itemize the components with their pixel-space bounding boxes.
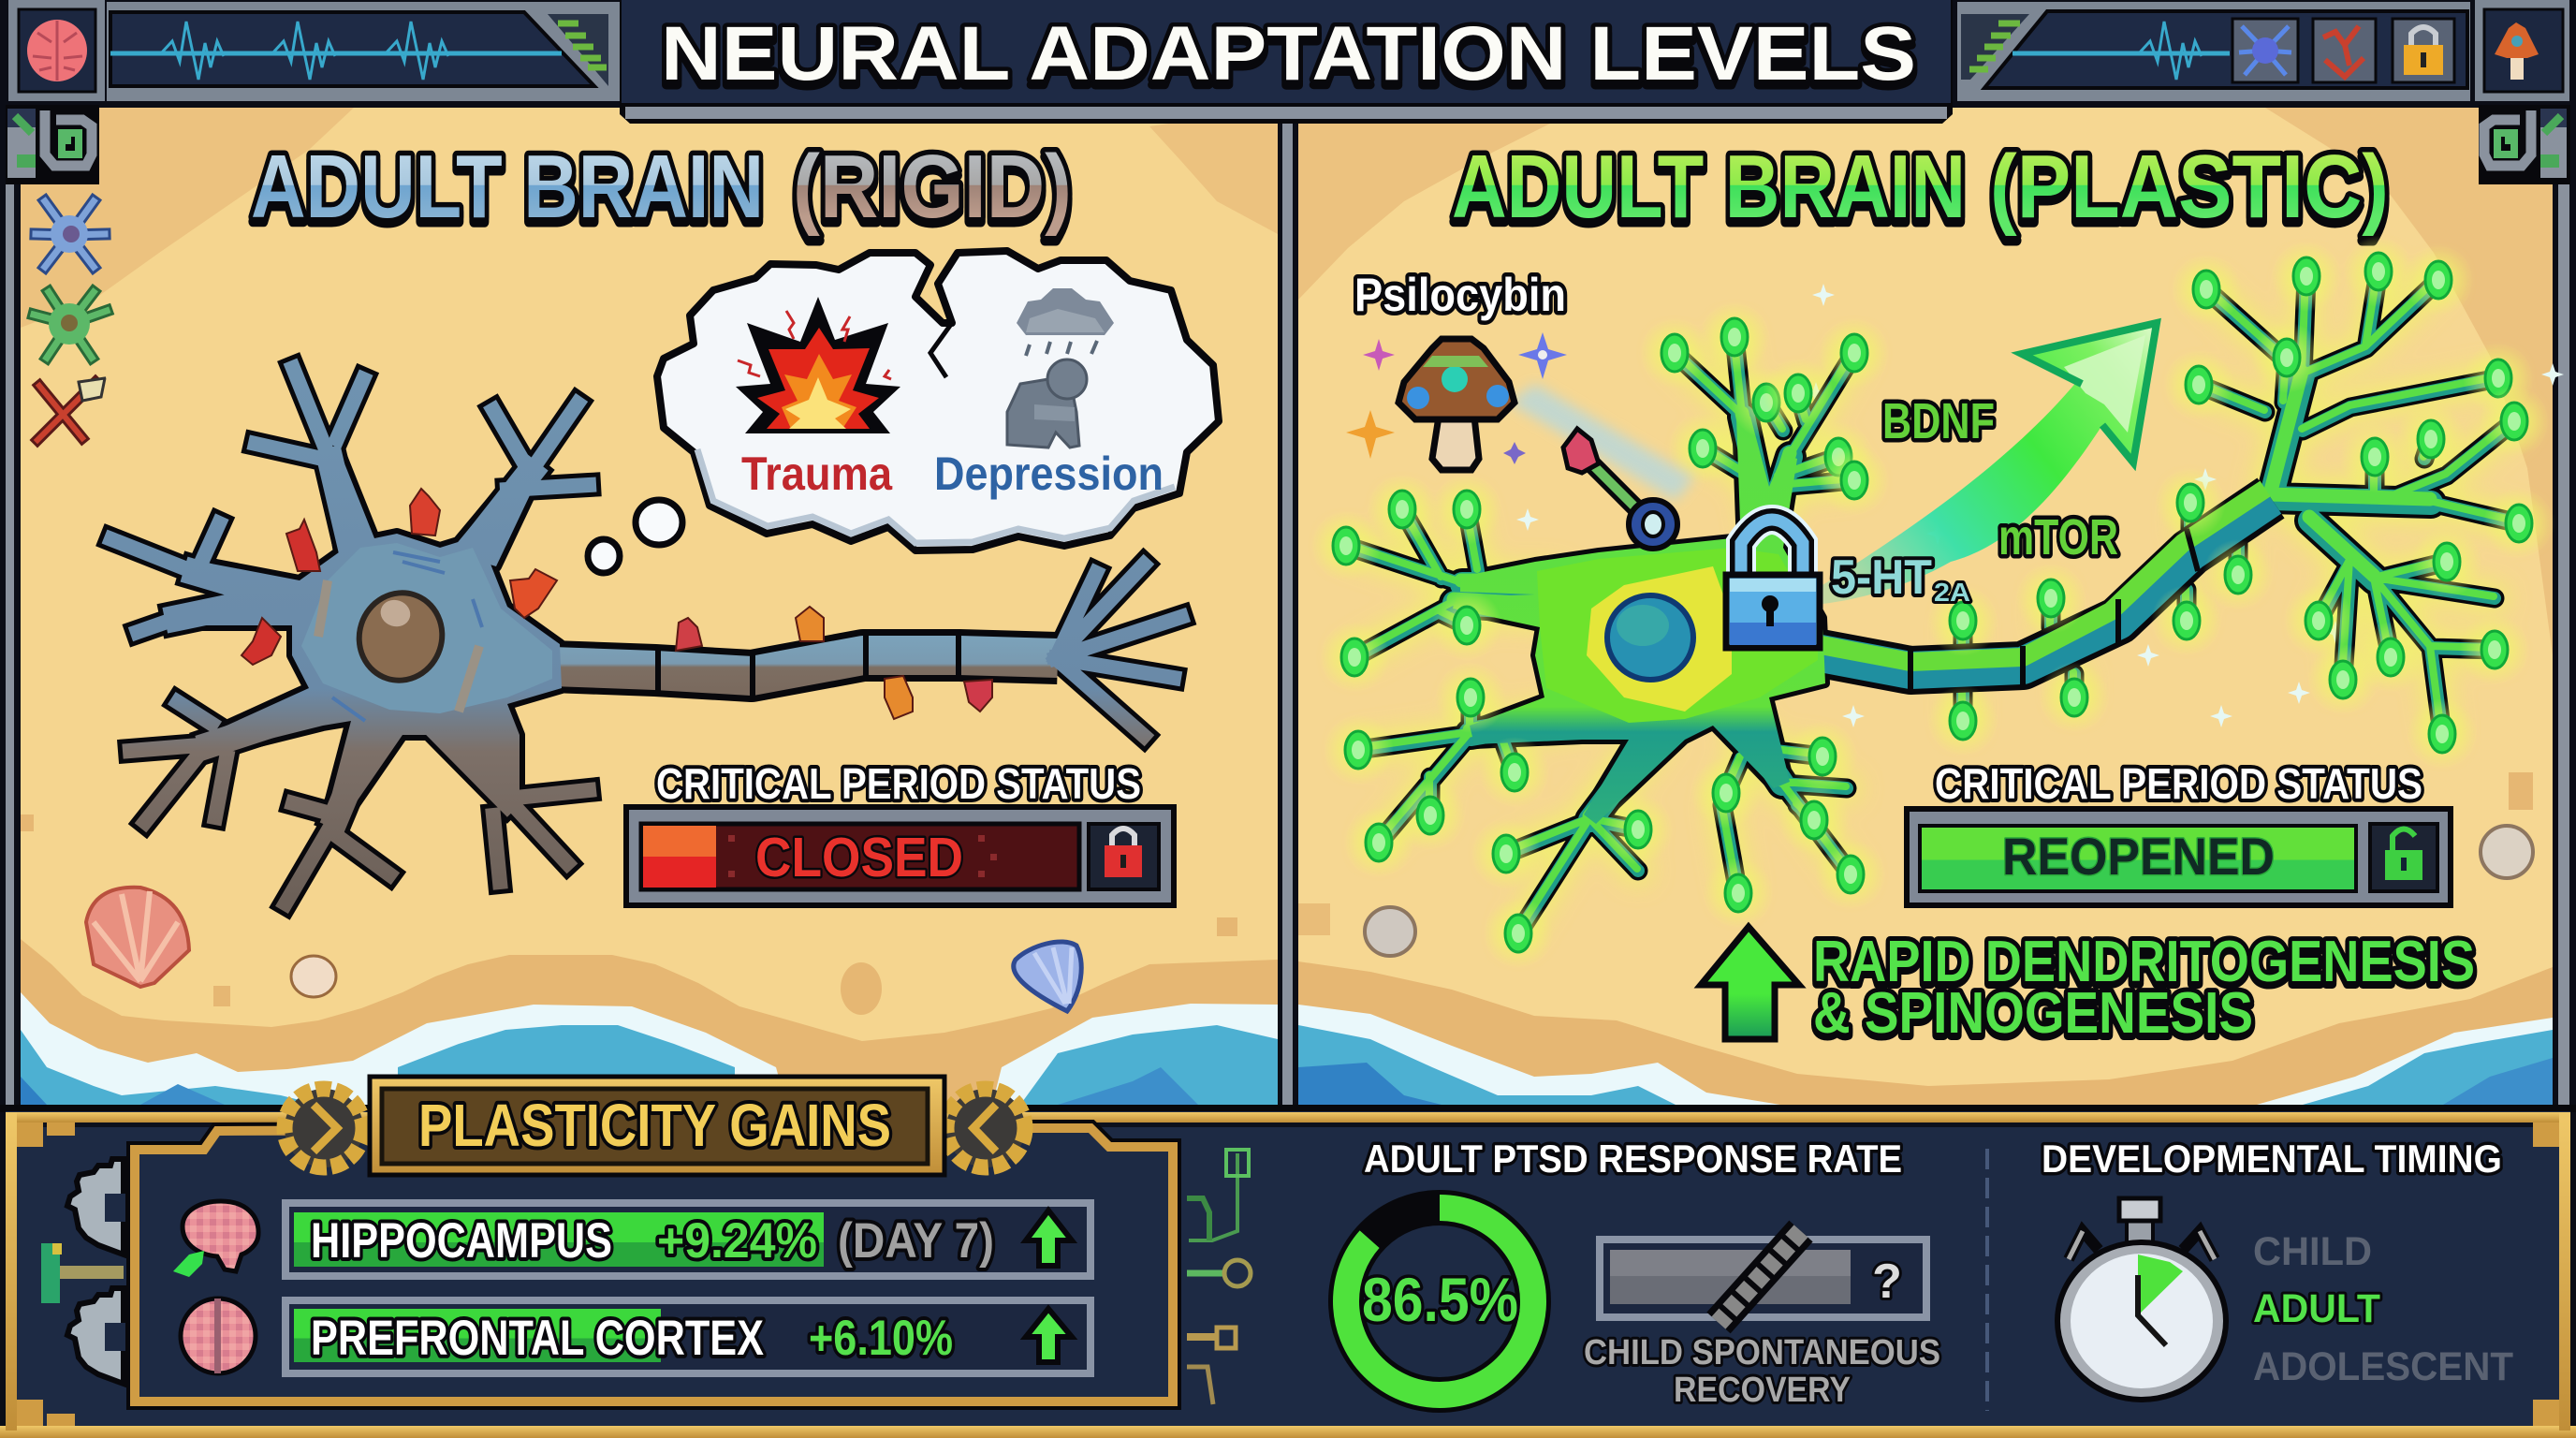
- icon: mushroom: [2495, 22, 2539, 80]
- locked bar: [1600, 1231, 1926, 1323]
- gear: right: [946, 1089, 1025, 1167]
- panel: developmental timing: ADULT: [2253, 1286, 2380, 1331]
- icon: open lock: [2385, 829, 2422, 880]
- icon tile: broken synapse: [2313, 19, 2376, 82]
- label: trauma: Trauma: [741, 448, 893, 500]
- title plaque: [370, 1077, 944, 1175]
- crack: [930, 323, 952, 377]
- panel: adult brain rigid: [6, 105, 1293, 1107]
- icon: pink shell: [86, 888, 189, 987]
- icon: depression figure: [1007, 288, 1114, 448]
- header: left ecg panel: [107, 2, 620, 101]
- bar: hippocampus: [285, 1203, 1090, 1276]
- gear: left: [285, 1089, 363, 1167]
- icon: prefrontal brain: [181, 1299, 256, 1373]
- bar: prefrontal cortex: PREFRONTAL CORTEX: [311, 1311, 764, 1366]
- label: 5-HT2A: 2A: [1934, 578, 1970, 607]
- header: brain box: [8, 0, 105, 101]
- callout: rapid dendritogenesis: RAPID DENDRITOGENESIS: [1813, 930, 2475, 994]
- sparkles: [1346, 332, 1567, 464]
- wet sand band: [21, 939, 1278, 1105]
- gears left: [67, 1159, 124, 1384]
- water: [21, 992, 1278, 1105]
- heading: adult brain plastic: [1452, 137, 2389, 237]
- title: NEURAL ADAPTATION LEVELS: [661, 11, 1916, 96]
- icon: chain: [1719, 1231, 1801, 1323]
- title plaque: PLASTICITY GAINS: [418, 1092, 891, 1159]
- nucleus: [348, 582, 453, 691]
- bar: hippocampus: HIPPOCAMPUS: [311, 1213, 612, 1269]
- icon: closed lock: [1105, 829, 1142, 877]
- callout: rapid dendritogenesis: & SPINOGENESIS: [1813, 981, 2253, 1046]
- icon: hippocampus brain: [173, 1201, 258, 1277]
- header: right ecg panel: [1957, 2, 2470, 101]
- locked bar: ?: [1872, 1255, 1902, 1309]
- corner brackets: [17, 1123, 2559, 1426]
- label: BDNF: BDNF: [1882, 393, 1995, 449]
- panel: PTSD response rate: CHILD SPONTANEOUS: [1584, 1333, 1940, 1372]
- donut chart: [1346, 1208, 1533, 1395]
- icon: blue shell: [1014, 942, 1081, 1011]
- callout: rapid dendritogenesis: [1701, 927, 2475, 1046]
- label: depression: Depression: [934, 448, 1164, 500]
- status: critical period closed: [626, 759, 1174, 905]
- panel: bottom console: [0, 1105, 2576, 1438]
- arrow: up: [1026, 1309, 1072, 1362]
- shells and pebbles: [86, 826, 2533, 1011]
- icon: psilocybin mushroom: [1346, 269, 1694, 501]
- sand specks: [21, 814, 1237, 1015]
- neuron: plastic: [1310, 236, 2564, 969]
- panel: PTSD response rate: RECOVERY: [1674, 1371, 1851, 1410]
- axon: [1816, 489, 2271, 691]
- panel: PTSD response rate: [1346, 1137, 1940, 1410]
- panel: plasticity gains: [135, 1077, 1173, 1401]
- arrow: up: [1026, 1211, 1072, 1266]
- timeline labels: CHILD: [2253, 1229, 2372, 1274]
- header: title plate: [620, 0, 1953, 124]
- neuron: rigid: [111, 368, 1181, 903]
- soma: [1453, 417, 1825, 824]
- heading: adult brain rigid: ADULT BRAIN: [251, 137, 764, 237]
- icon: damaged red synapse: [37, 378, 105, 440]
- circuits right: [1187, 1150, 1251, 1404]
- axon: [552, 635, 1058, 697]
- corner ornament: left: [6, 105, 99, 184]
- icon: green neuron: [34, 292, 107, 358]
- thought bubbles: [588, 500, 682, 573]
- thought cloud: [657, 251, 1219, 550]
- label: 5-HT2A: 5-HT: [1831, 550, 1932, 605]
- glow: [1346, 271, 2519, 933]
- icon: blue lock: [1726, 520, 1820, 648]
- red spurs: [242, 489, 992, 719]
- icon: blue neuron: [36, 201, 105, 267]
- label: psilocybin: Psilocybin: [1354, 269, 1566, 321]
- status: critical period reopened: [1907, 759, 2451, 905]
- icon: explosion: [736, 297, 900, 433]
- bar: prefrontal cortex: +6.10%: [809, 1311, 953, 1366]
- arrow: growth: [1822, 321, 2159, 604]
- panel: developmental timing: ADOLESCENT: [2253, 1344, 2513, 1389]
- panel: developmental timing: DEVELOPMENTAL TIMING: [2042, 1137, 2502, 1181]
- donut chart: 86.5%: [1362, 1265, 1518, 1334]
- spine tips: [1310, 236, 2554, 969]
- arrow: up: [1701, 927, 1799, 1039]
- icon tile: gold lock: [2393, 19, 2454, 82]
- corner ornament: right: [2479, 105, 2570, 184]
- icon: brain: [27, 20, 87, 81]
- status: critical period closed: CRITICAL PERIOD STATUS: [656, 759, 1141, 808]
- sparkles: [1516, 284, 2564, 732]
- icon: receptor key: [1563, 429, 1677, 549]
- label: mTOR: mTOR: [1998, 509, 2118, 565]
- status: critical period closed: CLOSED: [755, 827, 963, 888]
- nucleus: [1607, 595, 1693, 680]
- header: mushroom box: [2475, 0, 2569, 101]
- panel: developmental timing: [1987, 1137, 2513, 1411]
- status: critical period reopened: REOPENED: [2002, 827, 2275, 886]
- panel: adult brain plastic: [1298, 105, 2569, 1107]
- status: critical period reopened: CRITICAL PERIOD STATUS: [1935, 759, 2422, 808]
- bar: prefrontal cortex: [285, 1300, 1090, 1373]
- wet sand band: [1298, 961, 2553, 1105]
- heading: adult brain plastic: (PLASTIC): [1990, 137, 2389, 237]
- icon tile: neuron: [2232, 19, 2298, 82]
- icon: stopwatch: [2057, 1198, 2226, 1400]
- ecg pulses: [161, 22, 448, 80]
- panel: PTSD response rate: ADULT PTSD RESPONSE RATE: [1364, 1137, 1902, 1181]
- heading: adult brain rigid: (RIGID): [793, 137, 1072, 237]
- soma: [173, 449, 562, 819]
- heading: adult brain plastic: ADULT BRAIN: [1452, 137, 1966, 237]
- bar: hippocampus: (DAY 7): [838, 1213, 994, 1269]
- connector: [41, 1243, 124, 1303]
- water: [1298, 1005, 2553, 1105]
- bar: hippocampus: +9.24%: [657, 1213, 817, 1269]
